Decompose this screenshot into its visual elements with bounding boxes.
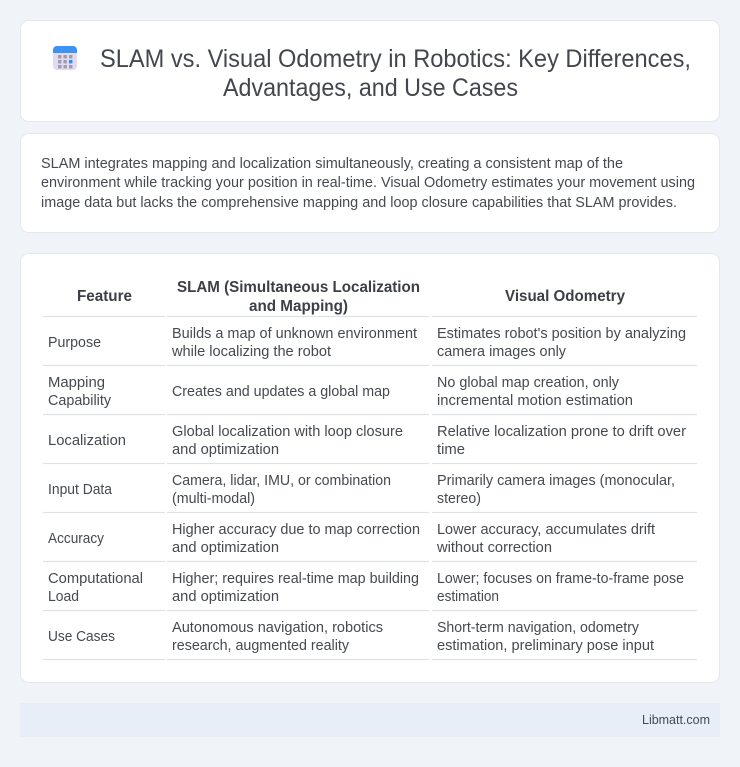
row: Input Data: stereo) — [437, 491, 481, 507]
row: Accuracy: Lower accuracy, accumulates drift — [437, 522, 655, 538]
panel: title header — [20, 20, 720, 122]
row: Accuracy: without correction — [436, 540, 552, 556]
intro text: SLAM integrates mapping and localization simultaneously, creating a consistent map of the — [41, 156, 623, 172]
row: Use Cases: Use Cases — [48, 629, 115, 645]
table header: and Mapping) — [249, 298, 348, 315]
row: Purpose — [48, 326, 686, 360]
icon: calendar — [53, 46, 77, 70]
intro text: environment while tracking your position in real-time. Visual Odometry estimates your movement using — [41, 175, 695, 191]
table header: Visual Odometry — [505, 288, 625, 305]
row: Computational Load: Lower; focuses on frame-to-frame pose — [437, 571, 684, 587]
footer — [20, 703, 720, 737]
panel: comparison table — [20, 254, 720, 682]
row: Purpose: Estimates robot's position by analyzing — [437, 326, 686, 342]
row: Purpose: Builds a map of unknown environment — [172, 326, 417, 342]
row: Use Cases: research, augmented reality — [172, 638, 350, 654]
row: Localization: Global localization with loop closure — [172, 424, 403, 440]
row: Localization — [48, 424, 686, 458]
row: Computational Load: Load — [48, 589, 79, 605]
row: Accuracy: Higher accuracy due to map correction — [172, 522, 420, 538]
row: Mapping Capability: Mapping — [48, 375, 105, 391]
row: Input Data: Primarily camera images (monocular, — [437, 473, 675, 489]
row: Computational Load: and optimization — [172, 589, 279, 605]
row: Mapping Capability: Capability — [48, 393, 112, 409]
row: Accuracy: and optimization — [172, 540, 279, 556]
title: SLAM vs. Visual Odometry in Robotics: Key Differences, — [100, 45, 691, 73]
row: Use Cases — [48, 620, 654, 654]
row: Accuracy: Accuracy — [48, 531, 105, 547]
row: Use Cases: estimation, preliminary pose input — [437, 638, 654, 654]
row: Input Data: Camera, lidar, IMU, or combination — [172, 473, 391, 489]
row: Accuracy — [48, 522, 655, 556]
row: Mapping Capability — [48, 375, 633, 409]
intro text — [41, 156, 695, 211]
row: Computational Load: Computational — [48, 571, 143, 587]
row: Input Data: (multi-modal) — [172, 491, 255, 507]
row: Computational Load: Higher; requires real-time map building — [172, 571, 419, 587]
row: Mapping Capability: incremental motion estimation — [437, 393, 633, 409]
table header — [77, 279, 625, 315]
title: Advantages, and Use Cases — [223, 74, 518, 102]
footer: Libmatt.com — [642, 713, 710, 727]
table header: SLAM (Simultaneous Localization — [177, 279, 420, 296]
row: Purpose: camera images only — [437, 344, 567, 360]
row: Localization: Localization — [48, 433, 126, 449]
row: Mapping Capability: No global map creation, only — [437, 375, 620, 391]
row: Mapping Capability: Creates and updates a global map — [172, 384, 390, 400]
row: Computational Load — [48, 571, 684, 605]
row: Purpose: Purpose — [48, 335, 101, 351]
row: Use Cases: Autonomous navigation, robotics — [172, 620, 383, 636]
title — [100, 45, 691, 102]
row: Localization: and optimization — [172, 442, 279, 458]
row: Input Data: Input Data — [48, 482, 113, 498]
table header: Feature — [77, 288, 132, 305]
table row lines — [43, 316, 697, 660]
row: Localization: time — [437, 442, 465, 458]
row: Input Data — [48, 473, 675, 507]
panel: introduction — [20, 134, 720, 232]
row: Purpose: while localizing the robot — [171, 344, 331, 360]
row: Use Cases: Short-term navigation, odometry — [437, 620, 640, 636]
row: Localization: Relative localization prone to drift over — [437, 424, 686, 440]
row: Computational Load: estimation — [437, 589, 499, 605]
intro text: image data but lacks the comprehensive mapping and loop closure capabilities that SLAM provides. — [41, 195, 677, 211]
